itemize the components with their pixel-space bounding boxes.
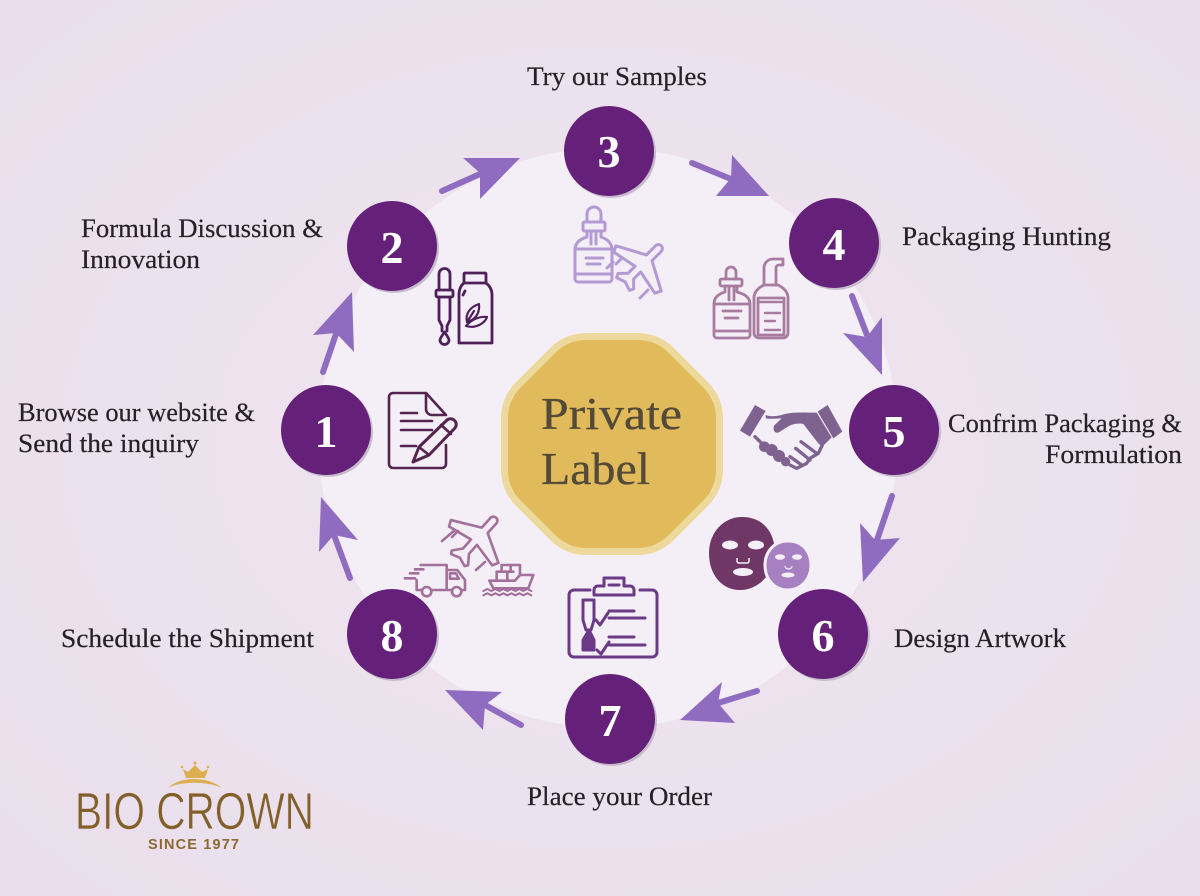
step 2 badge	[347, 201, 439, 293]
step 1 badge: 1	[314, 406, 338, 457]
step 6 badge: 6	[812, 610, 834, 661]
step 2 badge: 2	[380, 222, 404, 273]
step 7 badge: 7	[598, 695, 622, 746]
step 1 badge	[281, 385, 373, 477]
arrow: step 7 to 8	[445, 690, 521, 730]
label: step 1: Send the inquiry	[18, 429, 199, 458]
step 7 badge	[565, 674, 657, 766]
step 3 badge: 3	[598, 126, 620, 177]
logo: Bio Crown	[75, 761, 314, 853]
step 3 badge	[564, 106, 656, 198]
label: step 6: Design Artwork	[894, 624, 1066, 653]
icon: dropper and leaf bottle	[436, 268, 492, 344]
icon: dropper bottle and pump bottle	[714, 259, 788, 338]
label: step 7: Place your Order	[527, 782, 712, 811]
step 4 badge	[789, 198, 881, 290]
step 8 badge: 8	[380, 610, 404, 661]
step 5 badge: 5	[882, 406, 906, 457]
arrow: step 6 to 7	[680, 682, 757, 723]
center octagon: Private Label: Private	[541, 388, 682, 439]
icon: handshake	[740, 405, 842, 468]
label: step 4: Packaging Hunting	[902, 222, 1111, 251]
label: step 5	[948, 409, 1182, 469]
icon: face masks	[709, 517, 811, 590]
step 8 badge	[347, 589, 439, 681]
arrow: step 5 to 6	[860, 496, 900, 582]
label: step 5: Formulation	[1045, 440, 1182, 469]
center octagon: Private Label: Label	[541, 443, 650, 494]
logo: Bio Crown: BIO CROWN	[75, 783, 314, 841]
step 6 badge	[778, 589, 870, 681]
icon: document and pen	[389, 393, 456, 468]
logo: Bio Crown: SINCE 1977	[148, 837, 239, 853]
label: step 8: Schedule the Shipment	[61, 624, 315, 653]
step 4 badge: 4	[822, 219, 846, 270]
arrow: step 2 to 3	[442, 158, 520, 199]
arrow: step 4 to 5	[843, 296, 882, 375]
icon: sample bottle and plane	[575, 207, 684, 307]
label: step 3: Try our Samples	[527, 62, 707, 91]
label: step 1	[18, 398, 255, 458]
central disc	[318, 148, 898, 728]
arrow: step 1 to 2	[313, 292, 354, 372]
icon: plane, truck and ship	[405, 496, 533, 596]
label: step 2	[81, 214, 323, 274]
label: step 5: Confrim Packaging &	[948, 409, 1182, 438]
arrow: step 8 to 1	[319, 497, 358, 578]
label: step 2: Formula Discussion &	[81, 214, 323, 243]
label: step 1: Browse our website &	[18, 398, 255, 427]
icon: order clipboard	[569, 578, 657, 657]
step 5 badge	[849, 385, 941, 477]
center octagon: Private Label	[541, 383, 682, 505]
label: step 2: Innovation	[81, 245, 200, 274]
arrow: step 3 to 4	[692, 155, 769, 196]
